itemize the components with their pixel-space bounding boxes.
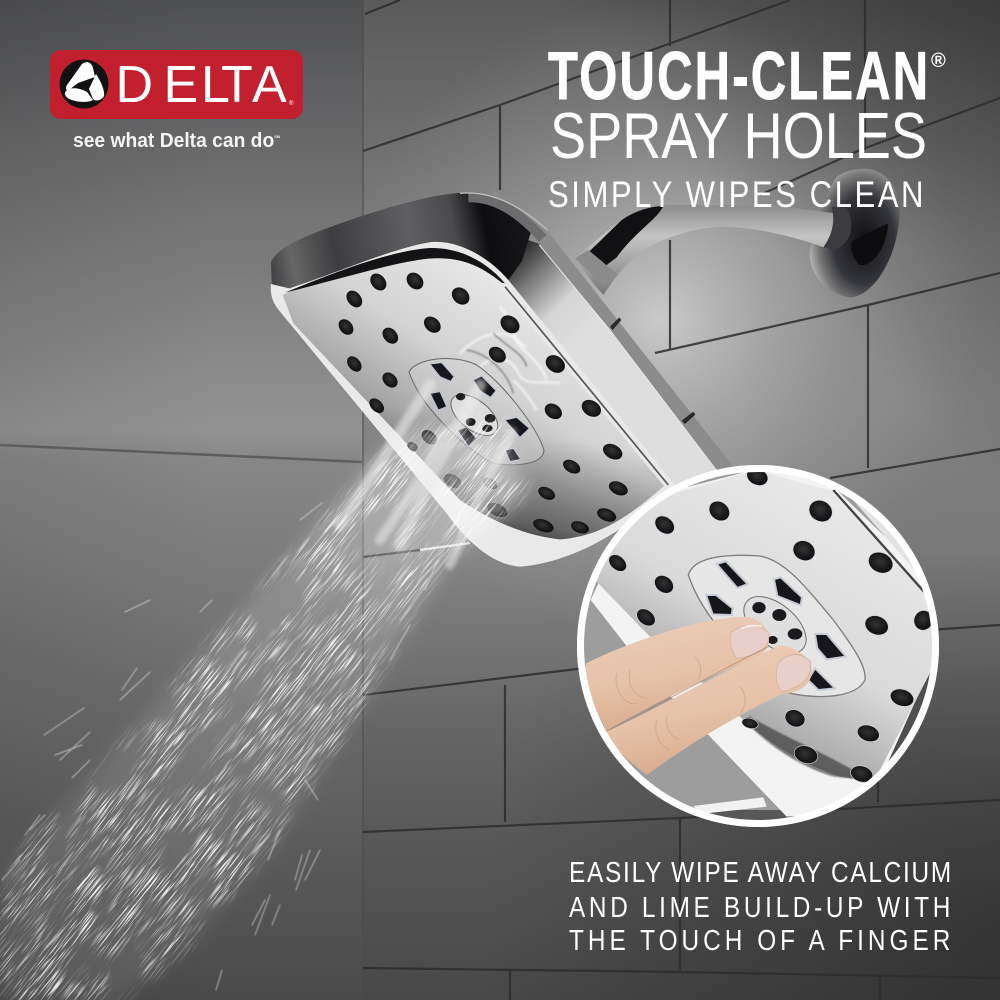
inset center nozzle plate <box>688 555 865 697</box>
head center nozzle plate <box>409 358 544 465</box>
flange collar <box>823 207 851 250</box>
head top edge strip <box>468 197 543 238</box>
body copy: wipe away calcium <box>569 856 951 956</box>
logo wordmark: DELTA <box>116 56 287 114</box>
inset background tiles <box>584 472 930 820</box>
title line 1: TOUCH-CLEAN <box>548 37 928 114</box>
logo tagline: see what Delta can do <box>73 130 282 152</box>
head top chrome band <box>271 193 532 297</box>
flange highlight <box>851 223 888 265</box>
shower arm and wall flange <box>575 169 900 297</box>
head outer side strip <box>493 190 733 488</box>
spray loose droplets <box>2 503 438 990</box>
water spray <box>0 385 525 1000</box>
head white rim <box>271 242 675 567</box>
subtitle: SIMPLY WIPES CLEAN <box>548 175 923 216</box>
spray streak texture <box>467 439 470 442</box>
upper finger <box>585 617 769 731</box>
inset circle: finger wiping spray holes <box>570 460 950 840</box>
head spray face <box>283 254 664 539</box>
head side plate notches <box>610 317 695 424</box>
logo registered mark: ® <box>289 100 294 107</box>
flange <box>810 169 900 297</box>
head side plate <box>500 233 718 487</box>
shower head <box>271 190 733 567</box>
inset chrome face <box>595 470 937 783</box>
title line 2: SPRAY HOLES <box>550 99 927 172</box>
logo red badge <box>50 50 303 119</box>
arm <box>575 205 843 295</box>
inset shower rim <box>591 467 940 817</box>
logo tagline: SM <box>274 134 281 139</box>
body copy: wipe away calcium: EASILY WIPE AWAY CALCIUM <box>569 856 951 888</box>
body copy: wipe away calcium: AND LIME BUILD-UP WITH <box>569 891 950 923</box>
lower finger <box>607 645 812 775</box>
arm dark chrome reflection <box>583 206 663 265</box>
Delta logo <box>50 50 303 119</box>
logo emblem <box>60 60 108 108</box>
title: touch-clean spray holes <box>548 37 946 216</box>
head inner dark lip <box>285 248 505 293</box>
inset spray holes <box>606 464 935 785</box>
arm thread <box>575 250 618 285</box>
registered mark: ® <box>931 50 946 72</box>
head spray holes <box>336 269 630 536</box>
head right inner edge line <box>505 287 668 485</box>
spray glow cone <box>0 430 525 1000</box>
body copy: wipe away calcium: THE TOUCH OF A FINGER <box>569 924 950 956</box>
head top edge highlight <box>460 193 547 230</box>
head strip highlight <box>539 245 719 474</box>
nozzle water streams <box>340 385 512 565</box>
calcium build-up on face <box>460 307 560 410</box>
